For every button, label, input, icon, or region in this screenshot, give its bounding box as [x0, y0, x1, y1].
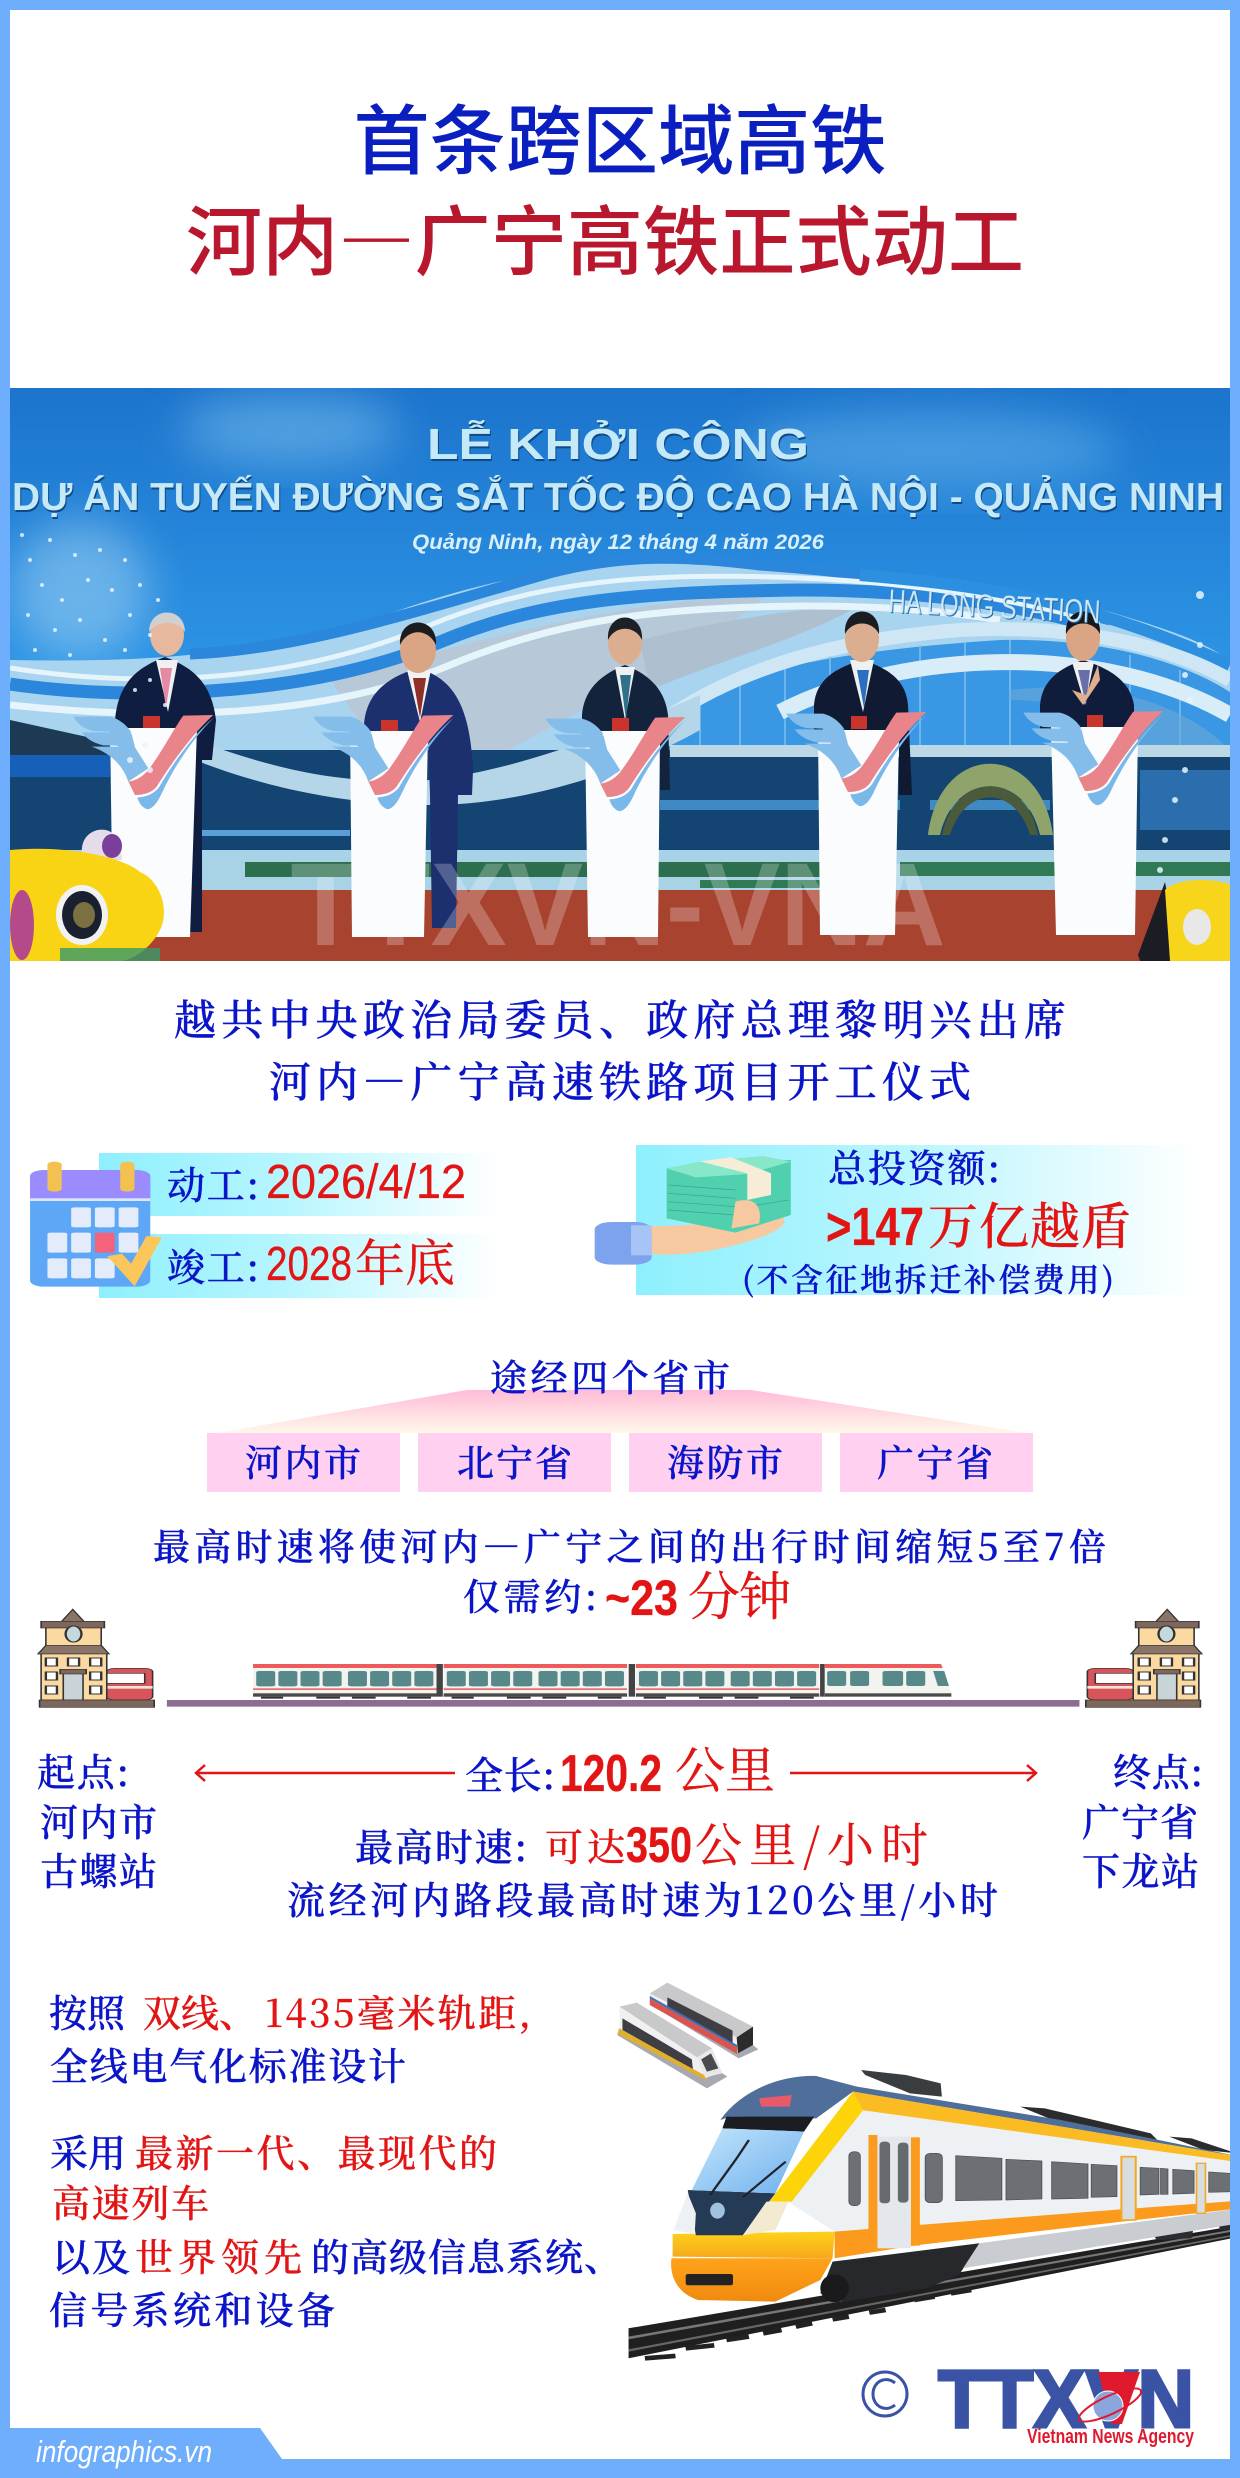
technical standard text [49, 1983, 531, 2091]
top speed prefix: 可达 [545, 1817, 626, 1872]
standard: gauge: 1435毫米轨距, [265, 1983, 531, 2038]
destination label: 终点: [1113, 1742, 1203, 1797]
watermark: TTXVN-VNA [290, 839, 946, 971]
icon: train [253, 1664, 951, 1699]
nose cap [720, 2076, 1240, 2157]
technology: high speed trains: 高速列车 [52, 2173, 209, 2228]
icon: departure station [38, 1609, 154, 1707]
investment label: 总投资额: [828, 1138, 1000, 1193]
start label: 动工: [167, 1155, 259, 1210]
destination [1082, 1742, 1203, 1896]
top speed value: 350 [626, 1817, 692, 1873]
subtitle [174, 988, 1066, 1110]
province: Quang Ninh [840, 1433, 1033, 1492]
lower front [673, 2232, 835, 2258]
travel time text [153, 1517, 1106, 1630]
technology: signal systems: 信号系统和设备 [49, 2280, 335, 2335]
province: Hai Phong: 海防市 [667, 1433, 783, 1487]
roof equipment [861, 2070, 942, 2097]
province: Hai Phong [629, 1433, 822, 1492]
rail track [629, 2225, 1240, 2358]
backdrop heading: LỄ KHỞI CÔNG [427, 418, 809, 469]
backdrop subheading: DỰ ÁN TUYẾN ĐƯỜNG SẮT TỐC ĐỘ CAO HÀ NỘI - QUẢNG NINH [12, 474, 1224, 519]
icon: hand holding money [595, 1156, 791, 1265]
province: Bac Ninh [418, 1433, 611, 1492]
technology: and: 以及 [52, 2227, 130, 2282]
length label: 全长: [465, 1745, 555, 1800]
fireworks [20, 533, 1204, 873]
person 2 [364, 622, 473, 928]
agency name: Vietnam News Agency [1027, 2426, 1195, 2448]
total length [196, 1731, 1036, 1803]
panel: provinces [207, 1348, 1033, 1492]
person 3 [582, 618, 670, 790]
subtitle line 2: 河内—广宁高速铁路项目开工仪式 [269, 1050, 971, 1110]
person 4 [814, 612, 912, 795]
finish date: 2028 [266, 1238, 352, 1291]
front face [688, 2190, 775, 2235]
pyramid connector [217, 1390, 1028, 1433]
red V and globe [1075, 2372, 1145, 2428]
top speed label: 最高时速: [355, 1817, 527, 1872]
Hanoi section speed: 流经河内路段最高时速为120公里/小时 [287, 1870, 998, 1925]
finish date suffix: 年底 [355, 1224, 455, 1296]
investment band [636, 1145, 1200, 1295]
copyright symbol [863, 2372, 907, 2416]
title line 2: 河内—广宁高铁正式动工 [186, 181, 1024, 291]
length unit: 公里 [675, 1731, 775, 1803]
roof stripe [853, 2092, 1240, 2162]
arrow: left [196, 1765, 455, 1781]
station sign: HA LONG STATION [888, 583, 1101, 630]
province: Hanoi: 河内市 [245, 1433, 361, 1487]
agency wordmark: TTXVN [938, 2354, 1194, 2445]
person 5 [1040, 612, 1134, 730]
travel time unit: 分钟 [688, 1555, 791, 1630]
body [788, 2110, 1240, 2232]
origin station: 古螺站 [40, 1841, 157, 1896]
icon: small trains [617, 1983, 758, 2088]
doors [868, 2135, 1205, 2248]
technology: adopt: 采用 [50, 2123, 126, 2178]
copyright logo [863, 2354, 1195, 2448]
icon: arrival station [1086, 1609, 1202, 1707]
plaza and ground [10, 850, 1230, 961]
finish label: 竣工: [167, 1237, 259, 1292]
province: Bac Ninh: 北宁省 [457, 1433, 573, 1487]
top speed [355, 1809, 928, 1876]
person 1 [115, 612, 216, 932]
technology: information systems: 的高级信息系统、 [311, 2227, 622, 2282]
finish date band [99, 1234, 499, 1298]
origin label: 起点: [37, 1742, 129, 1797]
subtitle line 1: 越共中央政治局委员、政府总理黎明兴出席 [174, 988, 1066, 1048]
panel: investment [595, 1138, 1200, 1301]
podiums with logos [73, 711, 1164, 937]
backdrop sky [10, 388, 1230, 660]
origin [37, 1742, 157, 1896]
travel time reduction: 最高时速将使河内—广宁之间的出行时间缩短5至7倍 [153, 1517, 1106, 1571]
arrow: right [790, 1765, 1036, 1781]
panel: dates [30, 1153, 499, 1298]
backdrop date: Quảng Ninh, ngày 12 tháng 4 năm 2026 [412, 531, 824, 554]
technology text [49, 2123, 622, 2335]
track [167, 1700, 1079, 1707]
top speed unit: 公里/小时 [695, 1809, 928, 1876]
origin city: 河内市 [40, 1792, 157, 1847]
travel time value: ~23 [605, 1570, 678, 1626]
investment note: (不含征地拆迁补偿费用) [742, 1255, 1114, 1301]
bogies [820, 2243, 979, 2302]
title [186, 80, 1024, 291]
photo: groundbreaking ceremony [10, 388, 1230, 971]
start date band [99, 1153, 499, 1216]
route diagram [38, 1609, 1202, 1707]
footer tab [10, 2428, 282, 2470]
title line 1: 首条跨区域高铁 [354, 80, 886, 190]
length value: 120.2 [560, 1745, 662, 1803]
icon: calendar [30, 1162, 154, 1287]
technology: newest: 最新一代、最现代的 [135, 2123, 497, 2178]
travel time label: 仅需约: [463, 1567, 597, 1621]
windows [849, 2152, 1240, 2206]
technology: world leading: 世界领先 [135, 2227, 302, 2282]
investment amount: >147 [826, 1197, 924, 1257]
lion head left [10, 830, 164, 961]
investment unit: 万亿越盾 [928, 1187, 1131, 1259]
destination province: 广宁省 [1082, 1792, 1199, 1847]
provinces heading: 途经四个省市 [490, 1348, 730, 1402]
province: Quang Ninh: 广宁省 [877, 1433, 994, 1487]
lion head right [1138, 880, 1230, 961]
province: Hanoi [207, 1433, 400, 1492]
standard: electrified: 全线电气化标准设计 [50, 2036, 406, 2091]
standard: double track: 双线、 [143, 1983, 257, 2038]
start date: 2026/4/12 [266, 1156, 466, 1209]
destination station: 下龙站 [1082, 1841, 1199, 1896]
orange side stripe [835, 2201, 1240, 2258]
station building [10, 558, 1230, 855]
windshield [722, 2117, 814, 2132]
website label: infographics.vn [36, 2434, 212, 2469]
standard: label: 按照 [49, 1983, 126, 2038]
icon: high speed train [629, 2070, 1240, 2358]
